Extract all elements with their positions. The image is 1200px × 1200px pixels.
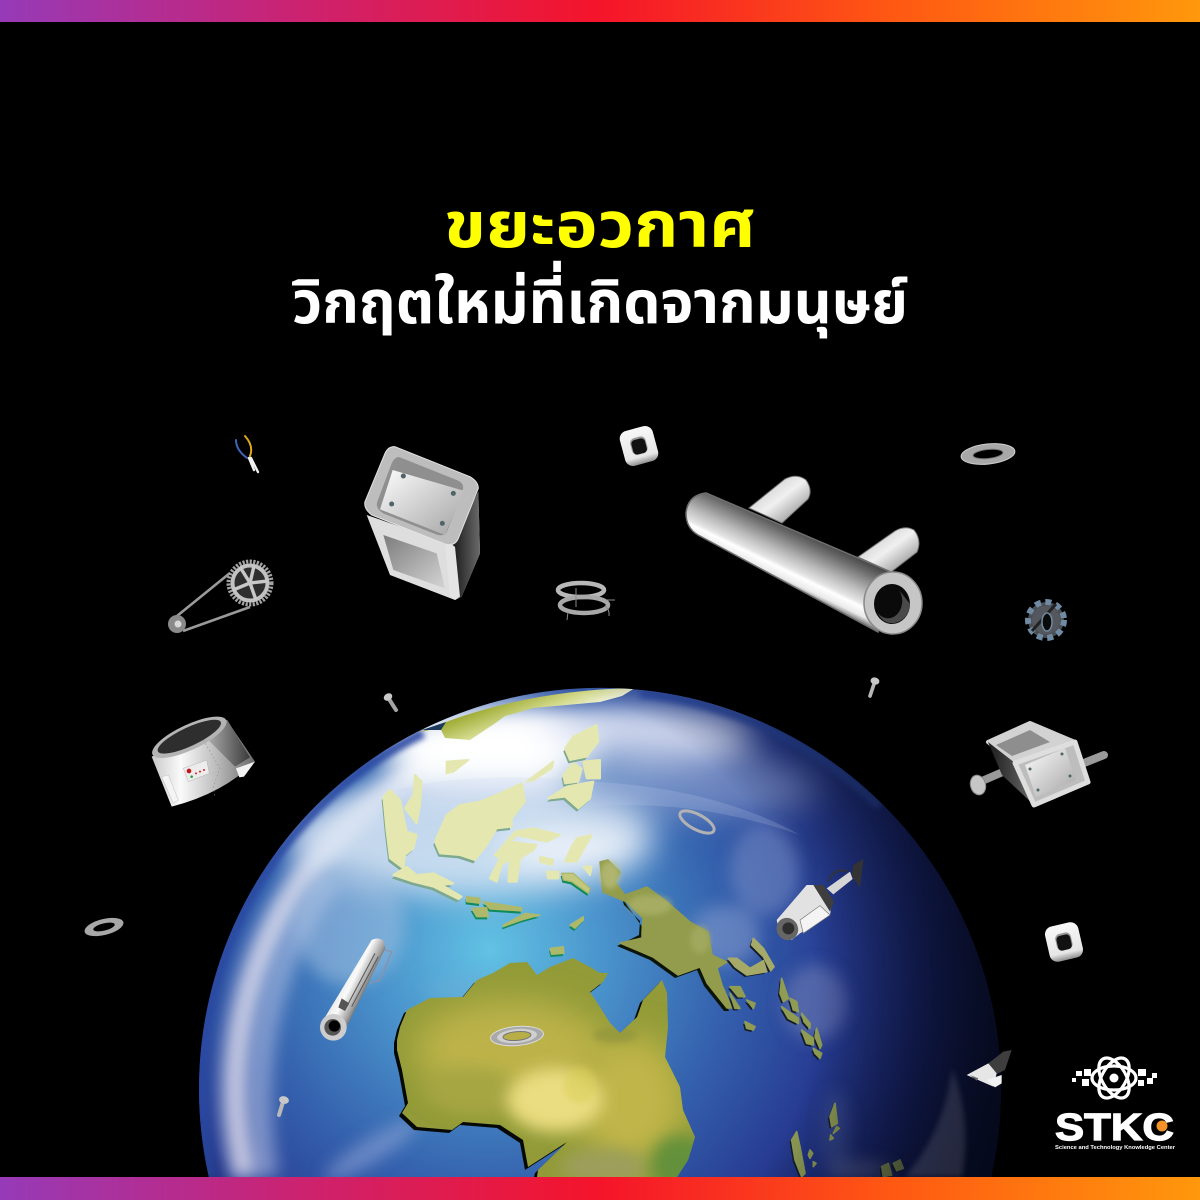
title: ขยะอวกาศ	[444, 189, 756, 261]
logo pixels	[1072, 1069, 1157, 1086]
debris: coil	[558, 583, 615, 620]
debris: rectangular block	[365, 447, 480, 600]
logo wordmark: STKC	[1055, 1107, 1174, 1149]
inner rim band	[261, 880, 330, 1177]
cloud patches	[295, 825, 892, 1189]
title: วิกฤตใหม่ที่เกิดจากมนุษย์	[291, 260, 908, 339]
debris: washer over australia	[490, 1024, 544, 1048]
cloud cover over north	[285, 704, 820, 896]
bottom gradient bar	[0, 1177, 1200, 1200]
logo dot	[1156, 1120, 1168, 1132]
tube	[686, 493, 891, 632]
pale sunda landmasses	[382, 725, 600, 957]
debris: screw bottom	[278, 1095, 290, 1115]
debris: square nut top	[618, 424, 660, 468]
debris: tube over ocean	[320, 938, 392, 1041]
tube end	[864, 572, 922, 634]
debris: block with axle	[968, 723, 1104, 805]
lesser sunda shadows	[466, 876, 589, 957]
islands	[728, 938, 903, 1177]
bottom right glare	[905, 1068, 965, 1177]
new guinea	[600, 860, 732, 1011]
debris: large pipe with pegs	[686, 476, 922, 634]
debris: chain and sprocket	[168, 562, 272, 633]
debris: cylinder module	[147, 709, 255, 807]
lesser sunda islands	[467, 873, 590, 954]
debris: square nut right	[1043, 921, 1085, 963]
melanesian islands	[726, 938, 903, 1179]
debris: rocket fragment	[967, 1050, 1012, 1087]
island shadows	[726, 940, 901, 1179]
sprocket	[228, 562, 272, 604]
shadow limb	[199, 688, 1001, 1177]
small pulley	[168, 615, 186, 633]
dark inlet	[422, 722, 446, 730]
logo: STKC	[1055, 1053, 1176, 1151]
earth globe	[195, 684, 1005, 1195]
sunda shadows	[382, 750, 588, 902]
australia shadow	[394, 982, 659, 1177]
australia	[397, 958, 695, 1177]
debris: washer top right	[960, 441, 1016, 467]
debris: screw right	[870, 676, 880, 696]
debris: pliers	[236, 436, 258, 472]
debris: cog	[1028, 602, 1064, 638]
outer blue limb	[201, 693, 880, 1177]
peg	[749, 476, 810, 523]
debris: camera	[772, 859, 863, 944]
top gradient bar	[0, 0, 1200, 22]
title	[291, 189, 908, 339]
debris: washer over ocean	[677, 806, 717, 838]
logo atom icon	[1092, 1053, 1136, 1103]
debris: screw left	[382, 692, 396, 710]
pale glass rim	[235, 725, 880, 1177]
glass arc highlight	[586, 781, 799, 834]
logo tagline: Science and Technology Knowledge Center	[1055, 1145, 1176, 1151]
top landmass	[420, 688, 635, 740]
sunda islands	[383, 725, 600, 899]
debris: washer left	[83, 914, 125, 940]
peg	[858, 528, 919, 572]
